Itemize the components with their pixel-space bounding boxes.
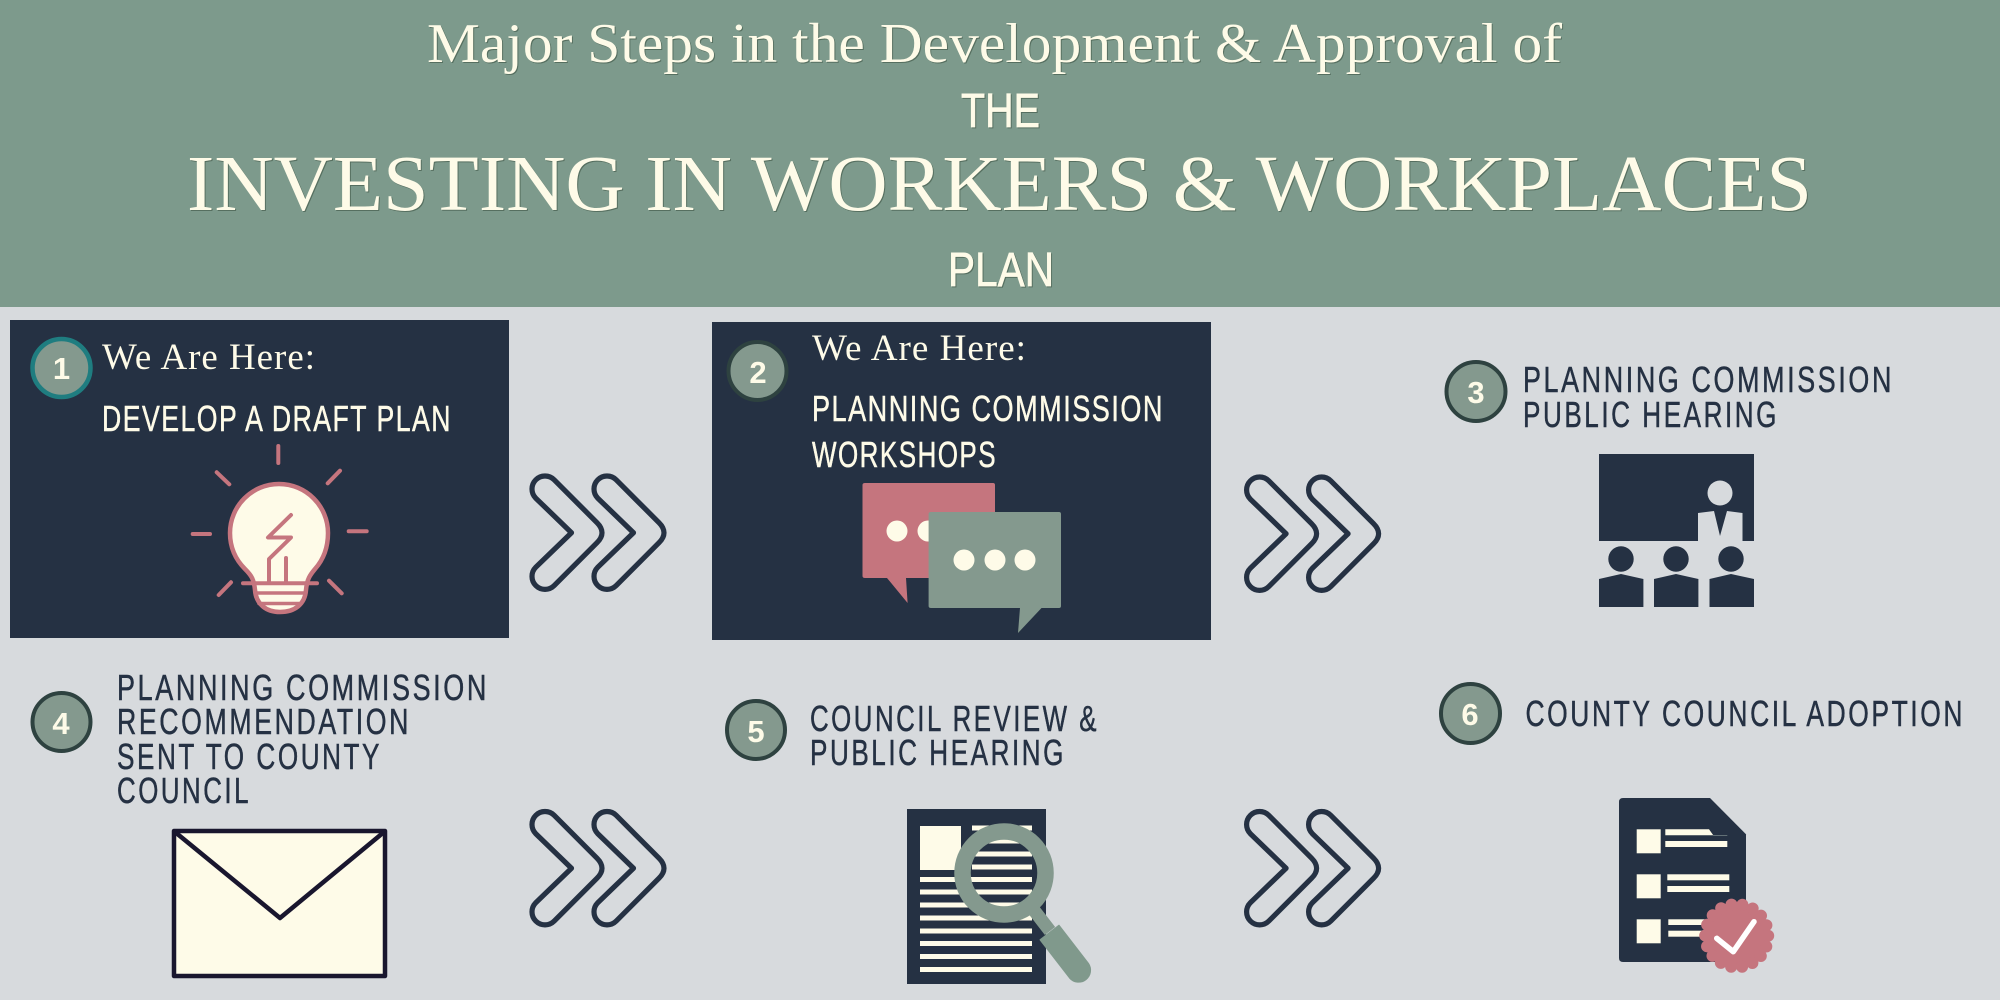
header banner xyxy=(0,0,2000,307)
step 4 heading: COUNCIL xyxy=(117,770,251,811)
badge 4 xyxy=(32,693,90,751)
step 4 heading: RECOMMENDATION xyxy=(117,701,411,742)
step 3 heading: PUBLIC HEARING xyxy=(1523,394,1779,435)
arrow: step 4 to 5 xyxy=(532,811,602,925)
icon: light bulb xyxy=(193,446,367,612)
badge 5: 5 xyxy=(747,714,765,749)
badge 1 xyxy=(32,339,90,397)
title line 3: INVESTING IN WORKERS & WORKPLACES xyxy=(187,141,1812,228)
badge 3: 3 xyxy=(1467,375,1485,410)
badge 2 xyxy=(728,342,786,400)
step 5 heading xyxy=(810,698,1099,773)
arrow: step 4 to 5 second chevron xyxy=(594,811,664,925)
we are here label: We Are Here: xyxy=(812,328,1027,369)
icon: document under magnifier xyxy=(907,809,1091,984)
step 4 heading: SENT TO COUNTY xyxy=(117,736,382,777)
arrow: step 1 to 2 second chevron xyxy=(594,476,664,589)
title line 2: THE xyxy=(961,85,1040,138)
badge 2: 2 xyxy=(749,355,767,390)
badge 6 xyxy=(1441,684,1500,743)
step 4 heading: PLANNING COMMISSION xyxy=(117,667,489,708)
arrow: step 5 to 6 xyxy=(1247,811,1317,925)
step 3 heading xyxy=(1523,359,1894,435)
title line 1: Major Steps in the Development & Approval of xyxy=(427,13,1562,75)
panel: step 4 xyxy=(32,667,489,976)
panel: step 2 xyxy=(712,322,1211,640)
step 4 heading xyxy=(117,667,489,811)
step 5 heading: COUNCIL REVIEW & xyxy=(810,698,1099,739)
badge 6: 6 xyxy=(1461,697,1479,732)
panel: step 5 xyxy=(727,698,1099,984)
badge 1: 1 xyxy=(53,351,70,386)
arrow: step 2 to 3 xyxy=(1247,477,1317,590)
panel: step 3 xyxy=(1446,359,1894,607)
arrow: step 1 to 2 xyxy=(532,476,602,589)
arrow: step 5 to 6 second chevron xyxy=(1309,811,1379,925)
icon: speech bubbles xyxy=(862,483,1061,633)
panel: step 6 xyxy=(1441,684,1965,969)
step 2 heading: WORKSHOPS xyxy=(812,434,997,475)
step 5 heading: PUBLIC HEARING xyxy=(810,732,1066,773)
icon: envelope xyxy=(174,831,385,976)
step 2 heading: PLANNING COMMISSION xyxy=(812,388,1164,429)
step 1 heading: DEVELOP A DRAFT PLAN xyxy=(102,398,452,439)
badge 4: 4 xyxy=(52,706,70,741)
step 2 heading xyxy=(812,388,1164,475)
icon: presenter and audience xyxy=(1599,454,1754,607)
icon: approved document xyxy=(1619,798,1770,969)
arrow: step 2 to 3 second chevron xyxy=(1309,477,1379,590)
title line 4: PLAN xyxy=(948,244,1054,297)
badge 5 xyxy=(727,701,785,759)
icon: seal with check xyxy=(1704,903,1770,969)
we are here label: We Are Here: xyxy=(102,337,316,378)
panel: step 1 xyxy=(10,320,509,638)
badge 3 xyxy=(1446,362,1506,421)
